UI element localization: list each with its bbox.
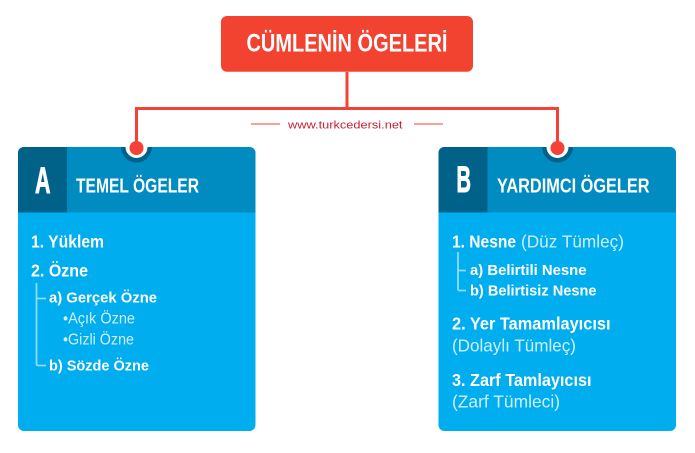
panel: B yardımcı ögeler <box>438 132 676 431</box>
panel: A temel ögeler <box>18 132 256 431</box>
website credit: www.turkcedersi.net <box>287 119 402 131</box>
panel B header <box>438 147 676 212</box>
panel B list: a) Belirtili Nesne <box>470 262 586 279</box>
connector dot left <box>130 141 144 155</box>
panel A list: •Açık Özne <box>63 310 135 328</box>
panel A list: b) Sözde Özne <box>49 358 149 374</box>
panel A letter: A <box>35 160 50 201</box>
connector dot right <box>550 141 564 155</box>
panel B list: b) Belirtisiz Nesne <box>470 282 596 300</box>
panel B letter: B <box>456 159 471 200</box>
panel B list <box>452 232 624 412</box>
panel B list: 1. Nesne <box>452 232 516 252</box>
connector lines <box>130 72 564 155</box>
title box <box>221 16 473 72</box>
panel A list: •Gizli Özne <box>63 330 134 348</box>
panel B list: (Düz Tümleç) <box>521 232 624 252</box>
panel B list: (Dolaylı Tümleç) <box>452 336 576 356</box>
panel A list <box>31 232 157 374</box>
panel B list: (Zarf Tümleci) <box>452 392 560 412</box>
panel B heading: YARDIMCI ÖGELER <box>497 175 650 198</box>
panel A list: a) Gerçek Özne <box>49 290 157 306</box>
panel A header <box>18 147 256 212</box>
title box: CÜMLENİN ÖGELERİ <box>246 28 448 58</box>
panel A heading: TEMEL ÖGELER <box>76 175 199 198</box>
panel A list: 2. Özne <box>31 260 88 280</box>
panel B list: 3. Zarf Tamlayıcısı <box>452 370 592 390</box>
panel A list: 1. Yüklem <box>31 232 104 252</box>
panel B list: 2. Yer Tamamlayıcısı <box>452 314 610 334</box>
